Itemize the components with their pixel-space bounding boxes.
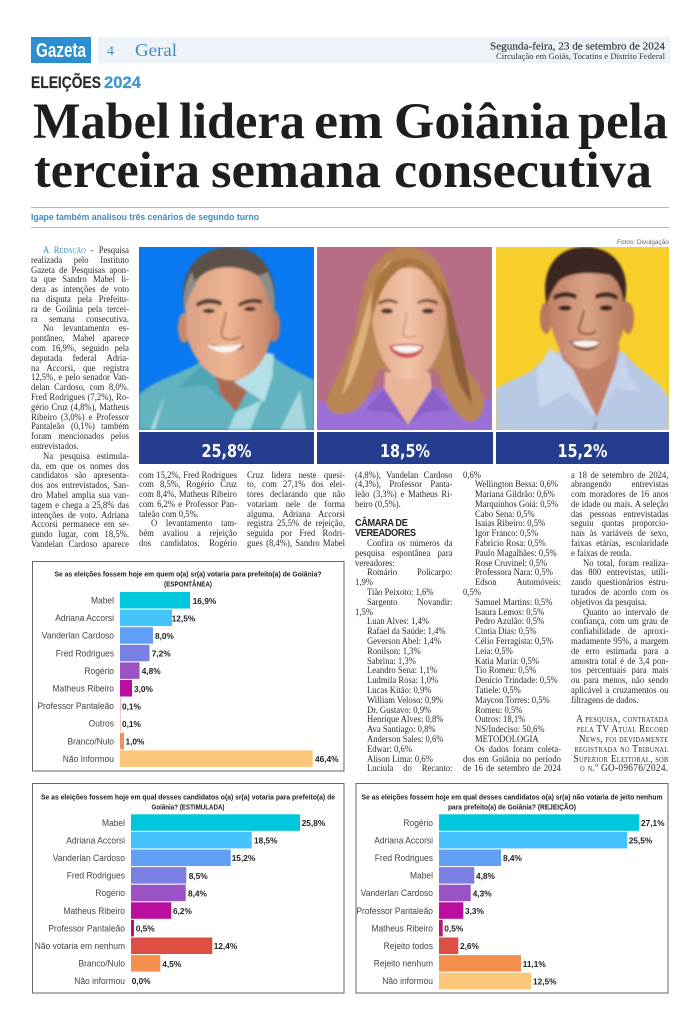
labels: estimulada: Fred Rodrigues bbox=[67, 870, 126, 881]
article text: column 5: Wellington Bessa: 0,6% bbox=[475, 479, 558, 490]
article text: column 5: Fabricio Rosa: 0,5% bbox=[475, 538, 546, 549]
article text: column 5: Samuel Martins: 0,5% bbox=[475, 597, 552, 608]
article text: column 1: Vandelan Cardoso aparece bbox=[31, 539, 129, 550]
chart title: espontânea bbox=[54, 570, 322, 588]
value bar: 15,2%: 15,2% bbox=[558, 442, 608, 462]
chart title: rejeição: Se as eleições fossem hoje em qual desses candidatos o(a) sr(a) não votaria de jeito nenhum bbox=[362, 792, 662, 802]
article text: column 1: Ribeiro (3,0%) e Professor bbox=[31, 412, 129, 423]
chart title: estimulada: Goiânia? (ESTIMULADA) bbox=[152, 802, 225, 812]
article text: column 1: Gazeta de Pesquisas apon- bbox=[31, 265, 129, 276]
article text: column 4: (4,8%), Vandelan Cardoso bbox=[355, 470, 452, 480]
article text: column 1: ta que Sandro Mabel li- bbox=[31, 274, 129, 285]
article text: column 6: registrada no Tribunal bbox=[574, 744, 668, 755]
values: estimulada: 8,4% bbox=[188, 888, 208, 898]
labels: espontânea: Adriana Accorsi bbox=[55, 613, 114, 623]
article text: column 1: gundo lugar, com 18,5%. bbox=[31, 529, 129, 540]
labels: espontânea bbox=[37, 595, 115, 764]
labels: estimulada bbox=[35, 817, 126, 986]
article text: column 6: zando questionários estru- bbox=[571, 577, 668, 588]
article text: column 5: Tio Romeu: 0,5% bbox=[475, 665, 536, 676]
values: estimulada: 8,5% bbox=[189, 871, 208, 881]
article text: column 4: Anderson Sales: 0,6% bbox=[367, 734, 443, 745]
article text: column 1: da, em que os nomes dos bbox=[31, 461, 129, 472]
article text: column 6: turados de acordo com os bbox=[571, 587, 668, 598]
logo: Gazeta: Gazeta bbox=[36, 40, 87, 62]
value bar: 18,5%: 18,5% bbox=[380, 442, 430, 462]
article text: column 5: Isaias Ribeiro: 0,5% bbox=[475, 518, 545, 529]
labels: rejeição: Matheus Ribeiro bbox=[371, 923, 433, 933]
article text: column 6 bbox=[571, 470, 668, 774]
article text: column 1: na disputa pela Prefeitu- bbox=[31, 294, 129, 305]
article text: column 4: Dr. Gustavo: 0,9% bbox=[367, 705, 431, 716]
article text: column 1: realizada pelo Instituto bbox=[31, 255, 129, 266]
values: espontânea: 7,2% bbox=[152, 649, 171, 659]
labels: rejeição: Mabel bbox=[410, 870, 433, 881]
article text: column 2: O levantamento tam- bbox=[150, 518, 237, 529]
article text: column 1: Na pesquisa estimula- bbox=[43, 451, 129, 462]
article text: column 6: confiabilidade de aproxi- bbox=[571, 626, 668, 637]
labels: rejeição: Professor Pantaleão bbox=[356, 905, 433, 916]
labels: rejeição: Não informou bbox=[382, 976, 433, 986]
article text: column 5: Maycon Torres: 0,5% bbox=[475, 695, 550, 706]
article text: column 1: delan Cardoso, com 8,0%. bbox=[31, 382, 129, 393]
article text: column 1: foram mencionados pelos bbox=[31, 431, 129, 442]
photo: Vanderlan Cardoso bbox=[496, 247, 669, 430]
article text: column 2: bém avaliou a rejeição bbox=[138, 528, 237, 539]
labels: espontânea: Mabel bbox=[91, 595, 114, 606]
article text: column 1: Fred Rodrigues (7,2%), Ro- bbox=[31, 392, 129, 403]
article text: column 5: Pedro Azulão: 0,5% bbox=[475, 616, 544, 627]
values: rejeição: 25,5% bbox=[629, 836, 653, 846]
article text: column 1: deputada federal Adria- bbox=[31, 353, 129, 364]
article text: column 6: a 18 de setembro de 2024, bbox=[571, 470, 668, 480]
labels: espontânea: Professor Pantaleão bbox=[37, 701, 114, 711]
article text: column 1 bbox=[31, 245, 129, 550]
article text: column 5: Marquinhos Goiá: 0,5% bbox=[475, 499, 558, 510]
labels: rejeição: Rejeito todos bbox=[384, 941, 434, 951]
article text: column 6: amostra total é de 3,4 pon- bbox=[571, 656, 668, 667]
article text: column 4: Rafael da Saúde: 1,4% bbox=[367, 626, 446, 637]
article text: column 5: dos em Goiânia no período bbox=[463, 754, 561, 765]
values: espontânea: 4,8% bbox=[142, 666, 161, 676]
article text: column 2 bbox=[138, 470, 237, 549]
values: rejeição: 3,3% bbox=[465, 906, 485, 916]
article text: column 6: tos percentuais para mais bbox=[571, 665, 668, 676]
values: espontânea: 3,0% bbox=[134, 684, 154, 694]
article text: column 6: pela TV Atual Record bbox=[577, 724, 668, 735]
article text: column 2: com 15,2%, Fred Rodrigues bbox=[138, 470, 237, 480]
article text: column 1: A Redação - Pesquisa bbox=[43, 245, 129, 256]
article text: column 2: taleão com 0,5%. bbox=[138, 509, 198, 520]
article text: column 6: de erro estimada para a bbox=[571, 646, 668, 657]
article text: column 5: Paulo Magalhães: 0,5% bbox=[475, 548, 557, 559]
values: rejeição: 4,8% bbox=[476, 871, 496, 881]
values: rejeição: 12,5% bbox=[533, 976, 557, 986]
article text: column 5: 0,6% bbox=[463, 470, 481, 480]
article text: column 5: Leia: 0,5% bbox=[475, 646, 513, 657]
labels: estimulada: Adriana Accorsi bbox=[66, 835, 125, 845]
article text: column 1: dro Mabel amplia sua van- bbox=[31, 490, 129, 501]
article text: column 4: Ava Santiago: 0,8% bbox=[367, 724, 436, 735]
article text: column 4: 1,5% bbox=[355, 607, 373, 618]
values: espontânea bbox=[122, 596, 339, 764]
article text: column 4: vereadores: bbox=[355, 558, 395, 569]
article text: column 5: Mariana Gildrão: 0,6% bbox=[475, 489, 555, 500]
article text: column 4: Sabrina: 1,3% bbox=[367, 656, 416, 667]
logo: Gazeta bbox=[31, 37, 91, 63]
article text: column 4: Edwar: 0,6% bbox=[367, 744, 412, 755]
values: estimulada: 12,4% bbox=[214, 941, 238, 951]
values: espontânea: 0,1% bbox=[122, 701, 142, 711]
article text: column 6: No total, foram realiza- bbox=[583, 558, 668, 569]
article text: column 2: com 8,4%, Matheus Ribeiro bbox=[138, 489, 237, 500]
labels: espontânea: Não Informou bbox=[63, 754, 114, 764]
article text: column 6: e faixas de renda. bbox=[571, 548, 631, 559]
article text: column 6: faixas etárias, escolaridade bbox=[571, 538, 668, 549]
article text: column 6: objetivos da pesquisa. bbox=[571, 597, 647, 608]
article text: column 1: ra semana consecutiva. bbox=[31, 314, 129, 325]
article text: column 5: 0,5% bbox=[463, 587, 481, 598]
title: em bbox=[314, 94, 383, 150]
article text: column 5: Denício Trindade: 0,5% bbox=[475, 675, 558, 686]
labels: espontânea: Vanderlan Cardoso bbox=[42, 630, 114, 641]
article text: column 5: Professora Nara: 0,5% bbox=[475, 567, 553, 578]
bar chart: rejeição bbox=[356, 784, 668, 993]
article text: column 4: Geverson Abel: 1,4% bbox=[367, 636, 441, 647]
article text: column 5: Katia Maria: 0,5% bbox=[475, 656, 539, 667]
header bar: Circulação em Goiás, Tocatins e Distrito Federal bbox=[496, 51, 666, 61]
photo credit: Fotos: Divulgação bbox=[617, 239, 669, 246]
chart title: rejeição: para prefeito(a) de Goiânia? (REJEIÇÃO) bbox=[448, 802, 577, 812]
header bar: Segunda-feira, 23 de setembro de 2024 bbox=[490, 40, 666, 52]
article text: column 4: (4,3%), Professor Panta- bbox=[355, 479, 452, 490]
article text: column 2: com 8,5%, Rogério Cruz bbox=[138, 479, 237, 490]
article text: column 5: Igor Franco: 0,5% bbox=[475, 528, 538, 539]
title: semana bbox=[211, 143, 381, 199]
article text: column 1: candidatos são apresenta- bbox=[31, 470, 129, 481]
chart title: estimulada: Se as eleições fossem hoje em qual desses candidatos o(a) sr(a) votaria para prefeito(a) de bbox=[41, 792, 335, 802]
article text: column 1: No levantamento es- bbox=[43, 323, 129, 334]
labels: espontânea: Branco/Nulo bbox=[67, 736, 114, 746]
photo: Sandro Mabel bbox=[139, 247, 314, 430]
article text: column 6: aplicável a cruzamentos ou bbox=[571, 685, 668, 696]
title: Goiânia bbox=[394, 94, 570, 150]
bar chart: espontânea bbox=[32, 562, 344, 771]
article text: column 2: dos candidatos. Rogério bbox=[138, 538, 237, 549]
article text: column 5: Isaura Lemos: 0,5% bbox=[475, 607, 544, 618]
article text: column 1: gério Cruz (4,8%), Matheus bbox=[31, 402, 129, 413]
values: estimulada: 0,5% bbox=[136, 924, 155, 934]
article text: column 5: Cintia Dias: 0,5% bbox=[475, 626, 537, 637]
article text: column 6: filtragens de dados. bbox=[571, 695, 638, 706]
article text: column 6: seguiu quotas proporcio- bbox=[571, 518, 668, 529]
article text: column 4: Henrique Alves: 0,8% bbox=[367, 714, 443, 725]
values: rejeição: 8,4% bbox=[503, 853, 523, 863]
values: estimulada bbox=[132, 818, 326, 986]
values: estimulada: 18,5% bbox=[254, 836, 278, 846]
bars: estimulada bbox=[131, 814, 300, 972]
labels: rejeição: Fred Rodrigues bbox=[375, 853, 434, 863]
article text: column 6: confiança, com um grau de bbox=[571, 616, 668, 627]
article text: column 1: tagem e chega a 25,8% das bbox=[31, 500, 129, 511]
labels: rejeição: Vanderlan Cardoso bbox=[361, 888, 433, 898]
article text: column 2: com 6,2% e Professor Pan- bbox=[138, 499, 237, 510]
article text: column 4 bbox=[355, 470, 452, 774]
section label: Eleições 2024: ELEIÇÕES bbox=[31, 72, 101, 92]
article text: column 3: alguma. Adriana Accorsi bbox=[247, 509, 345, 520]
values: estimulada: 0,0% bbox=[132, 976, 151, 986]
article text: column 5: Romeu: 0,5% bbox=[475, 705, 522, 716]
article text: column 6: das 800 entrevistas, utili- bbox=[571, 567, 668, 578]
article text: column 3 bbox=[247, 470, 345, 549]
article text: column 5: Outros: 18,1% bbox=[475, 714, 525, 725]
values: espontânea: 46,4% bbox=[315, 754, 339, 764]
article text: column 4: beiro (0,5%). bbox=[355, 499, 401, 510]
bars: espontânea bbox=[120, 592, 313, 767]
labels: estimulada: Professor Pantaleão bbox=[48, 923, 125, 933]
labels: estimulada: Matheus Ribeiro bbox=[63, 905, 125, 916]
values: rejeição: 11,1% bbox=[523, 959, 546, 969]
values: espontânea: 1,0% bbox=[126, 737, 145, 747]
title: Mabel bbox=[33, 94, 170, 150]
article text: column 1: dera as intenções de voto bbox=[31, 284, 129, 295]
article text: column 4: pesquisa espontânea para bbox=[355, 548, 452, 559]
values: estimulada: 6,2% bbox=[173, 906, 193, 916]
title: pela bbox=[578, 94, 668, 150]
bars: rejeição bbox=[439, 814, 639, 989]
header bar: 4 bbox=[107, 44, 114, 59]
labels: estimulada: Vanderlan Cardoso bbox=[53, 853, 125, 863]
article text: column 4: leão (3,3%) e Matheus Ri- bbox=[355, 489, 452, 500]
article text: column 1: ra de Goiânia pela tercei- bbox=[31, 304, 129, 315]
article text: column 5 bbox=[463, 470, 561, 774]
article text: column 5: Edson Automóveis: bbox=[475, 577, 561, 588]
article text: column 6: o n.º GO-09676/2024. bbox=[580, 763, 668, 774]
labels: estimulada: Não informou bbox=[74, 976, 125, 986]
article text: column 6: nais às variáveis de sexo, bbox=[571, 528, 668, 539]
values: rejeição: 4,3% bbox=[473, 888, 492, 898]
article text: column 6: Quanto ao intervalo de bbox=[583, 607, 668, 618]
labels: espontânea: Outros bbox=[89, 718, 115, 729]
values: rejeição: 2,6% bbox=[460, 941, 480, 951]
article text: column 4: 1,9% bbox=[355, 577, 373, 588]
article text: column 1: intenções de voto. Adriana bbox=[31, 510, 129, 521]
article text: column 3: seguida por Fred Rodri- bbox=[247, 528, 345, 539]
article text: column 6: madamente 95%, a margem bbox=[571, 636, 668, 647]
title: consecutiva bbox=[394, 143, 652, 199]
article text: column 1: 12,5%, e pelo senador Van- bbox=[31, 372, 129, 383]
values: estimulada: 4,5% bbox=[162, 959, 182, 969]
values: rejeição bbox=[444, 818, 665, 986]
article text: column 1: pontâneo, Mabel aparece bbox=[31, 333, 129, 344]
title: terceira bbox=[34, 143, 200, 199]
header bar bbox=[98, 37, 670, 63]
values: espontânea: 8,0% bbox=[155, 631, 175, 641]
labels: estimulada: Rogério bbox=[95, 888, 125, 898]
article text: column 5: Tatiele: 0,5% bbox=[475, 685, 521, 696]
article text: column 6: de idade ou mais. A seleção bbox=[571, 499, 668, 510]
photo: Adriana Accorsi bbox=[317, 247, 492, 430]
value bar: 18,5% bbox=[317, 432, 493, 464]
article text: column 6: Superior Eleitoral, sob bbox=[574, 754, 668, 765]
values: rejeição: 27,1% bbox=[641, 818, 665, 828]
values: espontânea: 16,9% bbox=[193, 596, 217, 606]
article text: column 3: registra 25,5% de rejeição, bbox=[247, 518, 345, 529]
article text: column 6: com moradores de 16 anos bbox=[571, 489, 668, 500]
article text: column 5: NS/Indeciso: 50,6% bbox=[475, 724, 545, 735]
labels: espontânea: Fred Rodrigues bbox=[56, 648, 115, 658]
article text: column 4: William Veloso: 0,9% bbox=[367, 695, 443, 706]
labels: estimulada: Mabel bbox=[102, 817, 125, 828]
article text: column 4: Alison Lima: 0,6% bbox=[367, 754, 433, 765]
values: estimulada: 15,2% bbox=[232, 853, 256, 863]
article text: column 4: VEREADORES bbox=[355, 528, 416, 539]
values: espontânea: 0,1% bbox=[122, 719, 142, 729]
chart title: rejeição bbox=[362, 792, 662, 812]
article text: column 4: Luciula do Recanto: bbox=[367, 763, 452, 774]
header bar: Geral bbox=[135, 40, 177, 60]
labels: rejeição: Rogério bbox=[403, 817, 433, 828]
value bar: 15,2% bbox=[496, 432, 669, 464]
labels: estimulada: Não votaria em nenhum bbox=[35, 941, 125, 951]
article text: column 4: Tião Peixoto: 1,6% bbox=[367, 587, 434, 598]
chart title: espontânea: (ESPONTÂNEA) bbox=[164, 580, 213, 588]
article text: column 6: abrangendo entrevistas bbox=[571, 479, 668, 490]
article text: column 6: A pesquisa, contratada bbox=[576, 714, 668, 725]
article text: column 1: com 16,9%, seguido pela bbox=[31, 343, 129, 354]
article text: column 3: gues (8,4%), Sandro Mabel bbox=[247, 538, 345, 549]
article text: column 5: Os dados foram coleta- bbox=[475, 744, 561, 755]
article text: column 6: das pessoas entrevistadas bbox=[571, 509, 668, 520]
article text: column 1: Accorsi permanece em se- bbox=[31, 519, 129, 530]
article text: column 4: Romário Policarpo: bbox=[367, 567, 452, 578]
article text: column 3: tores declarando que não bbox=[247, 489, 345, 500]
article text: column 4: Confira os números da bbox=[367, 538, 452, 549]
article text: column 4: Ludmila Rosa: 1,0% bbox=[367, 675, 438, 686]
article text: column 5: Célio Ferragista: 0,5% bbox=[475, 636, 553, 647]
article text: column 5: Cabo Sena: 0,5% bbox=[475, 509, 535, 520]
values: estimulada: 25,8% bbox=[302, 818, 326, 828]
article text: column 4: Luan Alves: 1,4% bbox=[367, 616, 429, 627]
article text: column 5: de 16 de setembro de 2024 bbox=[463, 763, 561, 774]
values: rejeição: 0,5% bbox=[444, 924, 464, 934]
article text: column 1: dos aos entrevistados, San- bbox=[31, 480, 129, 491]
article text: column 5: METODOLOGIA bbox=[475, 734, 539, 745]
article text: column 5: Rose Cruvinel: 0,5% bbox=[475, 558, 547, 569]
title bbox=[33, 94, 668, 199]
values: espontânea: 12,5% bbox=[172, 613, 196, 623]
article text: column 1: Pantaleão (0,1%) também bbox=[31, 421, 129, 432]
article text: column 6: ou para menos, não sendo bbox=[571, 675, 668, 686]
labels: rejeição: Rejeito nenhum bbox=[374, 958, 433, 969]
labels: rejeição bbox=[356, 817, 434, 986]
article text: column 3: to, com 27,1% dos elei- bbox=[247, 479, 345, 490]
article text: column 4: CÂMARA DE bbox=[355, 518, 407, 529]
chart title: espontânea: Se as eleições fossem hoje em quem o(a) sr(a) votaria para prefeito(a) de Goiânia? bbox=[54, 570, 322, 578]
chart title: estimulada bbox=[41, 792, 335, 812]
article text: column 4: Ronilson: 1,3% bbox=[367, 646, 421, 657]
article text: column 6: News, foi devidamente bbox=[579, 734, 668, 745]
article text: column 1: entrevistados. bbox=[31, 441, 79, 452]
bar chart: estimulada bbox=[32, 784, 344, 993]
article text: column 3: Cruz lidera neste quesi- bbox=[247, 470, 345, 480]
article text: column 4: Lucas Kitão: 0,9% bbox=[367, 685, 431, 696]
article text: column 1: na Accorsi, que registra bbox=[31, 363, 129, 374]
article text: column 3: votariam nele de forma bbox=[247, 499, 345, 510]
value bar: 25,8% bbox=[139, 432, 314, 464]
labels: estimulada: Branco/Nulo bbox=[78, 958, 125, 969]
section label: Eleições 2024: 2024 bbox=[104, 73, 142, 92]
value bar: 25,8%: 25,8% bbox=[202, 442, 252, 462]
article text: column 4: Sargento Novandir: bbox=[367, 597, 452, 608]
labels: espontânea: Matheus Ribeiro bbox=[52, 683, 114, 694]
labels: espontânea: Rogério bbox=[84, 666, 114, 676]
title: lidera bbox=[179, 94, 305, 150]
labels: rejeição: Adriana Accorsi bbox=[374, 835, 433, 845]
subtitle: Igape também analisou três cenários de segundo turno bbox=[31, 212, 259, 222]
article text: column 4: Leandro Sena: 1,1% bbox=[367, 665, 437, 676]
